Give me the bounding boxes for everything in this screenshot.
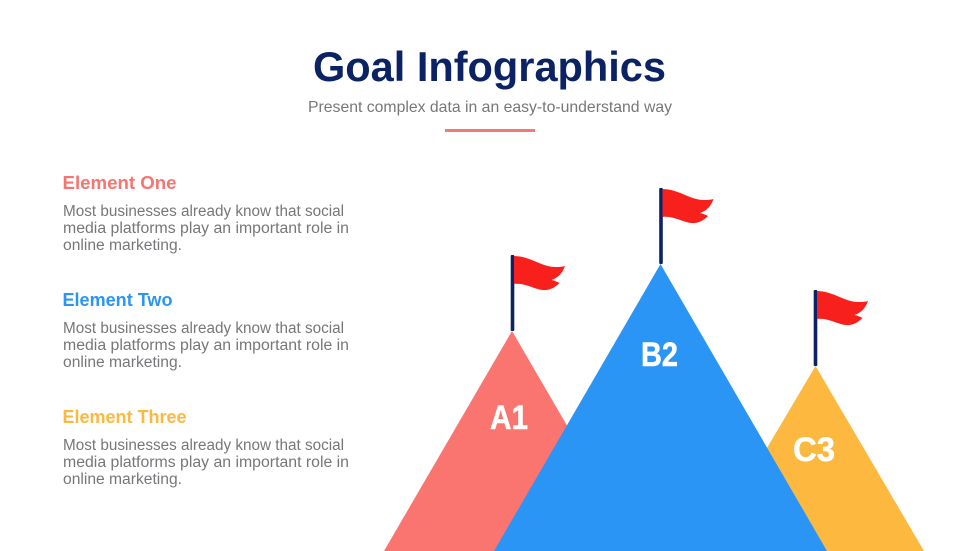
subtitle: Present complex data in an easy-to-understand way <box>308 99 672 116</box>
icon: flag on A1 <box>511 255 565 331</box>
label: A1: A1 <box>490 399 528 437</box>
heading: element three: Element Three <box>62 406 186 427</box>
title: Goal Infographics <box>313 43 666 90</box>
text block: element one: Most businesses already know that social <box>63 203 344 220</box>
text block: element three: online marketing. <box>63 471 182 488</box>
text block: element two: media platforms play an important role in <box>63 337 349 354</box>
text block: element one: media platforms play an important role in <box>63 220 349 237</box>
text block: element three: media platforms play an important role in <box>63 454 349 471</box>
mountain: A1 <box>384 331 640 551</box>
text block: element two: Most businesses already know that social <box>63 320 344 337</box>
mountain: C3 <box>706 366 924 551</box>
text block: element two: online marketing. <box>63 354 182 371</box>
text block: element three: Most businesses already know that social <box>63 437 344 454</box>
mountain: B2 <box>494 264 827 551</box>
heading: element one: Element One <box>62 172 176 193</box>
label: B2: B2 <box>641 336 678 374</box>
text block: element one: online marketing. <box>63 237 182 254</box>
label: C3: C3 <box>793 431 835 469</box>
text block: element two <box>63 320 349 371</box>
icon: flag on C3 <box>814 290 868 366</box>
panel: element two <box>62 289 349 371</box>
heading: element two: Element Two <box>62 289 172 310</box>
title underline <box>445 129 535 132</box>
text block: element three <box>63 437 349 488</box>
text block: element one <box>63 203 349 254</box>
panel: element three <box>62 406 349 488</box>
panel: element one <box>62 172 349 254</box>
icon: flag on B2 <box>659 188 714 264</box>
